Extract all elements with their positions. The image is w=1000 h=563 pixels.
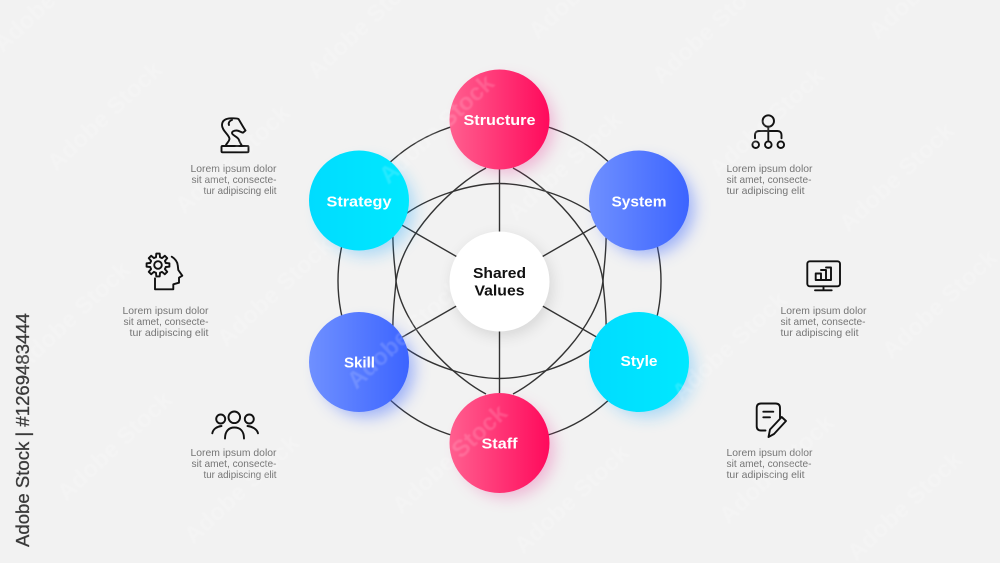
node: Structure (450, 70, 554, 173)
node: Shared Values (450, 232, 551, 335)
text: strategy description: Lorem ipsum dolor (190, 163, 277, 175)
text: system description (726, 163, 813, 197)
node: System: System (612, 194, 666, 210)
text: style description: sit amet, consecte- (780, 316, 866, 328)
text: staff description: tur adipiscing elit (204, 469, 277, 481)
watermark pattern: Adobe Stock (170, 99, 296, 219)
node: Strategy (309, 150, 414, 255)
text: staff description: Lorem ipsum dolor (190, 447, 277, 459)
node: Style: Style (620, 353, 658, 370)
watermark pattern: Adobe Stock (509, 439, 635, 559)
watermark pattern: Adobe Stock (42, 56, 168, 176)
text: skill description (122, 305, 209, 339)
watermark pattern: Adobe Stock (667, 286, 793, 406)
watermark pattern: Adobe Stock (834, 117, 960, 237)
text: strategy description (190, 163, 277, 197)
watermark pattern: Adobe Stock (179, 429, 305, 549)
node: Shared Values: Shared (473, 265, 526, 282)
text: style description: Lorem ipsum dolor (780, 305, 867, 317)
icon: head with gear (147, 254, 182, 289)
text: staff description (190, 447, 277, 481)
node: Structure: Structure (464, 112, 536, 129)
node: Staff: Staff (482, 436, 519, 452)
text: skill description: sit amet, consecte- (124, 316, 209, 328)
icon: monitor with bar chart (807, 261, 840, 290)
watermark pattern: Adobe Stock (212, 232, 338, 352)
text: strategy description: sit amet, consecte- (192, 174, 277, 186)
watermark pattern: Adobe Stock (52, 386, 178, 506)
watermark pattern: Adobe Stock (10, 256, 136, 376)
watermark pattern: Adobe Stock (842, 446, 968, 563)
watermark pattern: Adobe Stock (342, 274, 468, 394)
node: Staff (450, 393, 554, 497)
text: skill description: Lorem ipsum dolor (122, 305, 209, 317)
node: Strategy: Strategy (326, 194, 392, 210)
watermark pattern: Adobe Stock (387, 399, 513, 519)
watermark pattern: Adobe Stock (877, 244, 1000, 364)
icon: document with pencil (757, 404, 786, 437)
text: strategy description: tur adipiscing elit (204, 185, 277, 197)
stock id label: Adobe Stock | #1269483444 (12, 313, 33, 547)
node: Shared Values: Values (474, 282, 524, 300)
text: structure description: sit amet, consecte- (726, 458, 812, 470)
text: style description (780, 305, 867, 339)
icon: chess knight (222, 118, 248, 152)
node: Style (589, 312, 694, 417)
icon: org chart (752, 115, 784, 148)
watermark pattern: Adobe Stock (502, 106, 628, 226)
watermark pattern: Adobe Stock (714, 409, 840, 529)
text: system description: sit amet, consecte- (726, 174, 812, 186)
watermark pattern: Adobe Stock (704, 62, 830, 182)
text: style description: tur adipiscing elit (780, 327, 859, 339)
text: staff description: sit amet, consecte- (192, 458, 277, 470)
text: system description: tur adipiscing elit (726, 185, 805, 197)
node: Skill: Skill (344, 354, 375, 372)
text: system description: Lorem ipsum dolor (726, 163, 813, 175)
text: skill description: tur adipiscing elit (130, 327, 209, 339)
text: structure description: Lorem ipsum dolor (726, 447, 813, 459)
connecting line network (338, 120, 661, 443)
node: System (589, 150, 694, 255)
watermark pattern: Adobe Stock (374, 69, 500, 189)
text: structure description (726, 447, 813, 481)
text: structure description: tur adipiscing elit (726, 469, 805, 481)
icon: group of people (212, 412, 258, 438)
node: Skill (309, 312, 414, 417)
